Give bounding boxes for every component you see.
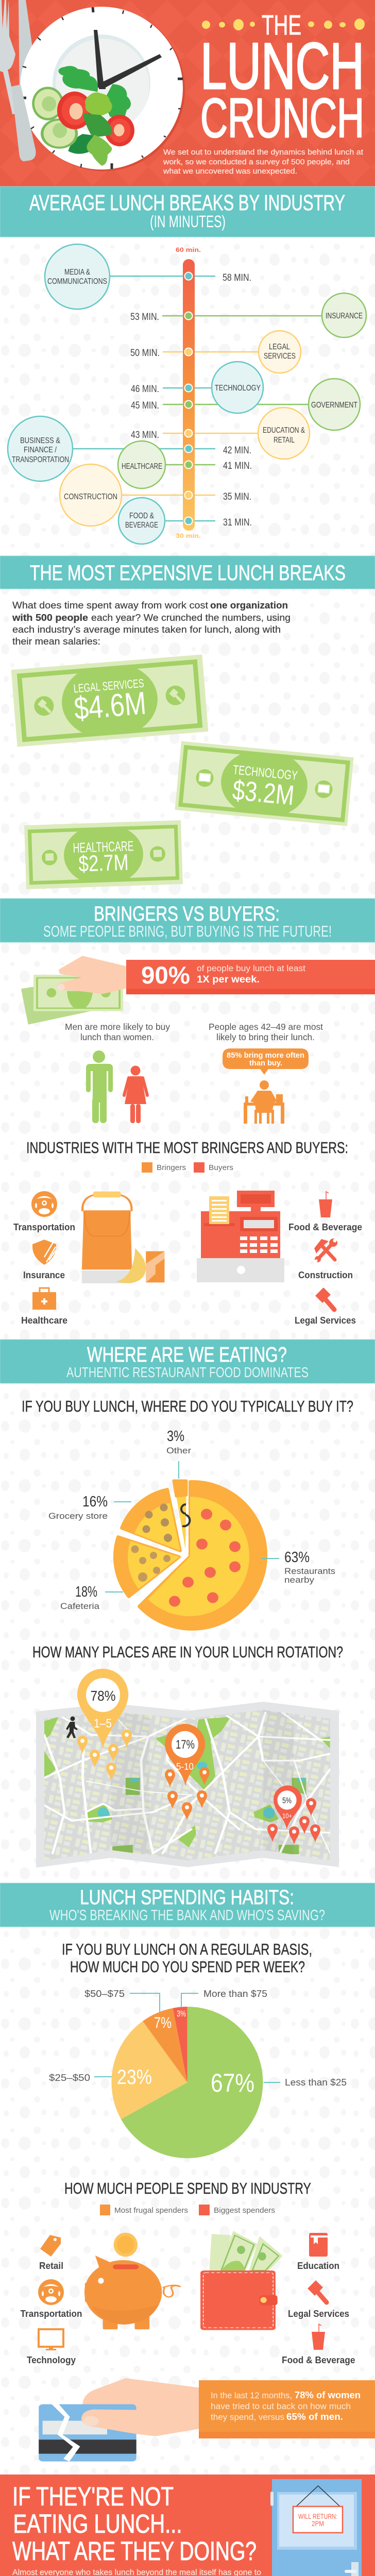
icon: knife [19, 0, 33, 103]
minute labels: 53 MIN. [130, 312, 159, 323]
icon: wallet with bills [200, 2231, 283, 2330]
slice: restaurants [139, 1482, 266, 1629]
icon: cup [319, 1192, 332, 1217]
dark green leaf [68, 134, 97, 154]
icon: fork head [0, 0, 17, 114]
bubble labels: RETAIL [274, 436, 295, 445]
icon: gavel [308, 2280, 327, 2302]
scale bottom label: 30 min. [176, 532, 201, 539]
pizza chart [48, 1428, 335, 1629]
right lettuce leaf [105, 84, 131, 118]
icon: man [86, 1050, 113, 1123]
big pin: 17% [165, 1724, 205, 1786]
bills [209, 2231, 283, 2272]
body text: cost question: one organization [210, 600, 288, 611]
minute labels: 45 MIN. [131, 400, 159, 411]
minute labels: 50 MIN. [130, 348, 160, 359]
icon: door with sign: 2PM [312, 2519, 324, 2528]
bubble labels: CONSTRUCTION [64, 493, 117, 501]
slice: more than $75 [173, 2007, 187, 2082]
timeline dots [184, 272, 193, 524]
money bill: legal services [11, 654, 208, 747]
text: men vs women: lunch than women. [80, 1032, 154, 1042]
text: ages: People ages 42–49 are most [209, 1022, 323, 1032]
big pin: 78%: 78% [91, 1688, 115, 1704]
label: insurance: Insurance [23, 1270, 65, 1280]
label: other [166, 1428, 191, 1455]
callout: women cut back: they spend, versus [211, 2412, 284, 2422]
callout bar: 90%: of people buy lunch at least [197, 963, 305, 973]
label: technology: Technology [27, 2355, 76, 2365]
bubble: healthcare [118, 441, 165, 488]
text: men vs women: Men are more likely to buy [65, 1022, 170, 1032]
label: legal services: Legal Services [295, 1315, 356, 1326]
pie leader lines [94, 1993, 280, 2082]
label: cafeteria [60, 1584, 100, 1611]
lunch break timeline chart [8, 244, 366, 544]
legend: spenders: Biggest spenders [214, 2206, 275, 2215]
slice: less than $25 [121, 2007, 263, 2158]
yellow green leaf [85, 92, 112, 116]
pie percentages: 67% [211, 2069, 254, 2097]
pie percentages: 3% [177, 2009, 186, 2019]
bubble labels: FINANCE / [24, 446, 57, 454]
header panel [0, 0, 375, 187]
icon: door with sign [270, 2479, 362, 2576]
slice: $25-$50 [111, 2021, 187, 2119]
heading band: where are we eating [0, 1340, 375, 1383]
bubble labels: MEDIA & [64, 268, 90, 277]
icon: hand with money [21, 956, 126, 1025]
icon: steering wheel [38, 2279, 64, 2305]
intro text [163, 148, 364, 176]
bubble: business [8, 416, 73, 481]
title: THE [262, 10, 301, 41]
small yellow pins [77, 1730, 132, 1781]
legend: spenders: Most frugal spenders [114, 2206, 188, 2215]
body text: cost question [12, 600, 291, 647]
pie percentages: 7% [154, 2014, 172, 2031]
money bill: healthcare [24, 820, 183, 889]
pie labels [49, 1989, 347, 2088]
icon: clock hands [94, 30, 162, 89]
map roads [44, 1713, 330, 1853]
heading band: where are we eating: WHERE ARE WE EATING? [87, 1343, 287, 1366]
callout bar: 90% [126, 960, 375, 994]
pie labels: $50–$75 [84, 1989, 125, 1999]
icon: woman [124, 1065, 147, 1123]
bringers industries list [13, 1191, 75, 1326]
icon: price tag [40, 2235, 61, 2257]
scale top label: 60 min. [176, 246, 201, 253]
tomato slices [57, 92, 134, 146]
label: restaurants: Restaurants [284, 1566, 335, 1576]
bubble labels: EDUCATION & [263, 426, 305, 435]
label: food and beverage: Food & Beverage [282, 2355, 355, 2365]
heading band: bringers vs buyers: BRINGERS VS BUYERS: [94, 903, 280, 925]
money bill: legal services: LEGAL SERVICES [73, 676, 144, 696]
callout bar: 90%: 90% [141, 961, 190, 989]
label: other: Other [166, 1446, 191, 1455]
bubble labels: COMMUNICATIONS [47, 277, 107, 286]
bubble labels: GOVERNMENT [311, 401, 357, 410]
callout: women cut back: have tried to cut back on how much [211, 2401, 351, 2411]
icon: piggy bank [84, 2233, 181, 2329]
label: transportation: Transportation [13, 1222, 75, 1232]
slice: other [174, 1481, 190, 1549]
bubble labels: HEALTHCARE [122, 462, 162, 471]
icon: medical case [32, 1288, 56, 1310]
minute labels [130, 273, 252, 528]
minute labels: 41 MIN. [223, 461, 252, 471]
label: grocery [48, 1494, 108, 1521]
title [200, 10, 364, 149]
banner title [12, 2482, 257, 2566]
heading band: spending habits: LUNCH SPENDING HABITS: [80, 1886, 294, 1909]
icon: book [309, 2233, 328, 2257]
bubble labels: BUSINESS & [20, 436, 60, 445]
callout: 85% bring [223, 1048, 309, 1075]
icon: salad [32, 66, 134, 166]
bubble labels: TECHNOLOGY [215, 384, 261, 393]
bubble labels [12, 268, 363, 530]
body text: cost question: with 500 people [12, 612, 88, 623]
heading band: spending habits [0, 1883, 375, 1927]
folded map [36, 1669, 339, 1868]
map fold shading [111, 1710, 294, 1855]
text: ages [209, 1022, 323, 1042]
pie percentages [117, 2009, 254, 2097]
pie labels: $25–$50 [49, 2073, 90, 2083]
money bill: technology: $3.2M [231, 774, 296, 811]
label: retail: Retail [39, 2261, 63, 2271]
bubble labels: BEVERAGE [125, 521, 158, 530]
big pin: 78% [77, 1669, 128, 1749]
icon: fork and knife handle [11, 84, 36, 161]
map lakes [97, 1762, 305, 1819]
bubble: construction [60, 464, 122, 526]
minute labels: 42 MIN. [223, 445, 251, 456]
icon: clock plate [20, 7, 185, 171]
bubble labels: FOOD & [129, 512, 154, 520]
bubble labels: INSURANCE [326, 312, 363, 320]
label: transportation: Transportation [21, 2309, 82, 2319]
money bill: technology [175, 741, 354, 826]
small orange pins [165, 1767, 210, 1820]
bubble: education [258, 408, 310, 459]
intro text: We set out to understand the dynamics behind lunch at [163, 148, 364, 157]
icon: steering wheel [31, 1191, 57, 1217]
icon: lunch bag, banana, box [82, 1192, 164, 1283]
top lettuce leaf [58, 66, 98, 92]
money bill: technology: TECHNOLOGY [232, 762, 298, 783]
legend: bringers and buyers: Buyers [209, 1163, 233, 1172]
body text: cost question: their mean salaries: [12, 636, 100, 647]
label: restaurants: nearby [284, 1575, 315, 1585]
slice: $50-$75 [143, 2008, 187, 2082]
small red pins [267, 1798, 320, 1844]
label: legal services: Legal Services [288, 2309, 349, 2319]
decorative yellow blobs [202, 19, 365, 30]
pie labels: More than $75 [203, 1989, 267, 1999]
pizza callout lines [105, 1461, 279, 1592]
banner title: EATING LUNCH... [13, 2509, 182, 2538]
label: food and beverage: Food & Beverage [288, 1222, 362, 1232]
frugal spenders list [21, 2235, 82, 2365]
bubble: technology [212, 362, 263, 413]
intro text: what we uncovered was unexpected. [163, 167, 297, 176]
connector lines [73, 276, 321, 521]
big pin: 17%: 17% [176, 1738, 195, 1752]
intro text: work, so we conducted a survey of 500 people, and [163, 158, 350, 166]
body text: cost question: each year? We crunched the numbers, using [91, 612, 291, 623]
bubble: legal [259, 331, 301, 373]
bubble labels: TRANSPORTATION [12, 455, 69, 464]
big pin: 5%: 10+ [282, 1812, 292, 1820]
callout: women cut back: 78% of women [295, 2390, 361, 2400]
big pin: 78%: 1–5 [94, 1717, 112, 1731]
minute labels: 58 MIN. [223, 273, 251, 283]
slice: grocery store [122, 1489, 180, 1551]
body text: cost question: each industry’s average minutes taken for lunch, along with [12, 624, 281, 635]
pie chart [49, 1989, 347, 2158]
legend: spenders [100, 2205, 275, 2215]
label: grocery: Grocery store [48, 1511, 108, 1521]
big pin: 5%: 5% [282, 1797, 292, 1805]
bubble: government [309, 379, 360, 430]
icon: cash register [197, 1191, 284, 1282]
bubble: insurance [322, 293, 366, 337]
icon: gavel [315, 1287, 334, 1310]
pie percentages: 23% [117, 2066, 152, 2089]
minute labels: 46 MIN. [131, 384, 159, 395]
icon: walking person [66, 1717, 78, 1738]
cucumber slices [32, 87, 78, 149]
text: men vs women [65, 1022, 170, 1042]
icon: tools [314, 1239, 337, 1262]
callout: women cut back [199, 2380, 375, 2438]
label: cafeteria: Cafeteria [60, 1601, 100, 1611]
map parks [44, 1717, 330, 1848]
heading band: bringers vs buyers [0, 899, 375, 942]
subheading: how much spend [62, 1940, 312, 1976]
icon: shield [32, 1240, 56, 1265]
label: restaurants: 63% [284, 1549, 310, 1566]
heading band: most expensive [0, 556, 375, 589]
heading band: where are we eating: AUTHENTIC RESTAURANT FOOD DOMINATES [66, 1364, 309, 1380]
bubble: food [118, 498, 165, 544]
callout: women cut back: 65% of men. [286, 2412, 343, 2422]
label: education: Education [297, 2261, 339, 2271]
buyers industries list [288, 1192, 362, 1326]
slice: cafeteria [115, 1537, 179, 1597]
big pin: 17%: 5-10 [176, 1761, 194, 1772]
gradient bar [183, 259, 195, 531]
bottom leaf [87, 135, 112, 166]
red banner: not eating lunch [0, 2475, 375, 2576]
industry bubbles [8, 244, 366, 544]
callout: 85% bring: 85% bring more often [227, 1051, 304, 1060]
icon: cup [312, 2324, 325, 2350]
label: cafeteria: 18% [75, 1584, 97, 1600]
minute labels: 35 MIN. [223, 492, 251, 502]
label: grocery: 16% [82, 1494, 108, 1510]
bubble: media [45, 244, 110, 309]
big pin: 5% [274, 1786, 302, 1829]
text: ages: likely to bring their lunch. [216, 1032, 315, 1042]
icon: person at desk [244, 1080, 284, 1124]
label: healthcare: Healthcare [21, 1315, 67, 1326]
callout: 85% bring: than buy. [249, 1059, 282, 1067]
callout: women cut back: In the last 12 months, [211, 2391, 292, 2400]
body text: cost question: What does time spent away from work cost [12, 600, 208, 611]
bubble labels: SERVICES [264, 352, 296, 361]
banner title: IF THEY'RE NOT [12, 2482, 174, 2511]
label: other: 3% [167, 1428, 184, 1445]
callout bar: 90%: 1X per week. [197, 974, 260, 985]
minute labels: 31 MIN. [223, 517, 252, 528]
label: construction: Construction [298, 1270, 353, 1280]
banner title: WHAT ARE THEY DOING? [12, 2536, 257, 2566]
minute labels: 43 MIN. [131, 430, 159, 440]
icon: hand with cut credit card [39, 2378, 199, 2462]
label: restaurants [284, 1549, 335, 1585]
money bill: legal services: $4.6M [73, 685, 147, 726]
middle leaf [82, 113, 112, 137]
biggest spenders list [282, 2233, 355, 2365]
icon: door with sign: WILL RETURN: [298, 2512, 337, 2520]
money bill: healthcare: HEALTHCARE [73, 838, 134, 856]
pie labels: Less than $25 [285, 2077, 347, 2088]
heading band: average lunch breaks: (IN MINUTES) [150, 212, 226, 231]
money bill: healthcare: $2.7M [78, 850, 129, 877]
heading band: average lunch breaks [0, 187, 375, 237]
icon: monitor [39, 2329, 63, 2350]
legend: bringers and buyers: Bringers [157, 1163, 186, 1172]
legend: bringers and buyers [142, 1162, 233, 1173]
bubble labels: LEGAL [269, 343, 290, 351]
